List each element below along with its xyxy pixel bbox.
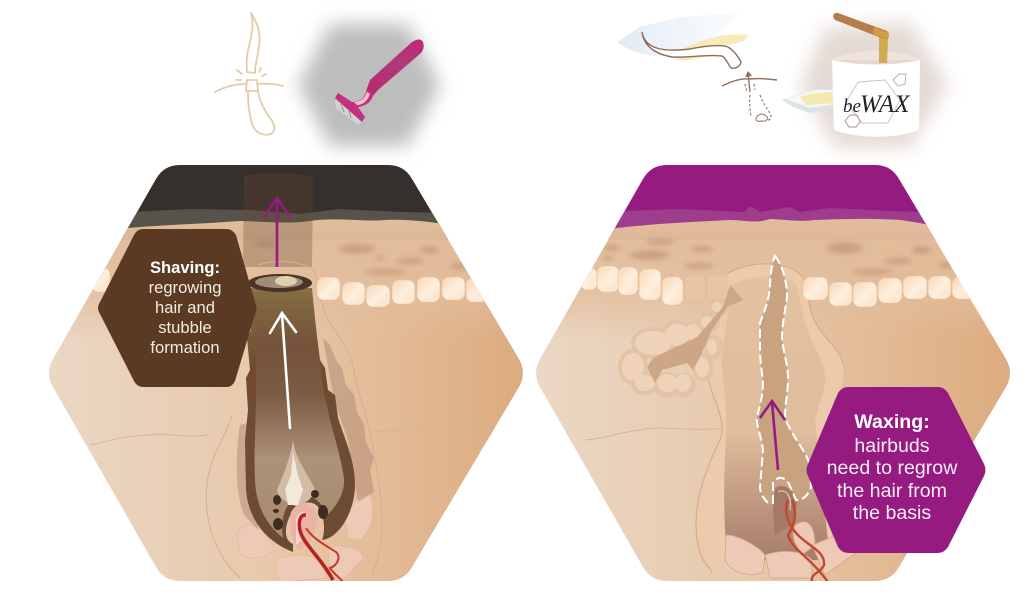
skin layer line [90, 430, 500, 445]
callout: waxing label: Waxing: [854, 411, 930, 433]
melanin spots [273, 490, 328, 530]
pink base cells [725, 522, 860, 578]
hair cut surface [248, 274, 312, 292]
icon: razor on grey hexagon [298, 24, 440, 146]
ghost hair stub [243, 173, 313, 267]
callout: shaving label: regrowing [149, 278, 221, 297]
faded skin cells [685, 280, 728, 300]
panel: shaving hexagon [40, 160, 535, 585]
callout: waxing label [806, 387, 986, 553]
jar: beWAX [843, 91, 911, 118]
jar [832, 13, 920, 137]
callout: shaving label: stubble [158, 318, 212, 337]
purple upper band [608, 165, 936, 240]
removed hair, dashed outline [757, 256, 811, 503]
follicle outline [207, 261, 382, 575]
icon: wax jar with logo [782, 13, 948, 148]
callout: waxing label: need to regrow [827, 457, 958, 479]
icon: hair pulled out with wax strip [617, 13, 777, 121]
blood vessel [786, 500, 830, 585]
follicle channel [722, 264, 844, 538]
hair root core [277, 440, 315, 506]
wax pad [782, 88, 840, 113]
papilla and blood vessel [290, 504, 344, 583]
hair shaft and bulb [245, 288, 355, 552]
dermis smudges [602, 239, 958, 275]
panel: waxing hexagon [525, 160, 1020, 585]
pink base cells [237, 494, 373, 582]
callout: shaving label: Shaving: [150, 258, 220, 277]
outer root sheath [237, 338, 374, 530]
callout: shaving label [98, 229, 256, 387]
callout: shaving label: formation [150, 338, 220, 357]
dark upper band [121, 165, 448, 240]
sebaceous gland [618, 285, 743, 398]
callout: shaving label: hair and [155, 298, 215, 317]
white growth arrow [270, 313, 296, 428]
callout: waxing label: the basis [853, 502, 931, 524]
skin cells row [92, 268, 488, 307]
purple growth arrow [264, 198, 290, 267]
dermis smudges [254, 241, 470, 275]
callout: waxing label: the hair from [837, 480, 947, 502]
icon: cut hair outline [215, 13, 283, 135]
purple growth arrow [760, 401, 785, 470]
callout: waxing label: hairbuds [854, 435, 930, 457]
hair matrix remnant [773, 486, 797, 535]
skin layer line [585, 428, 725, 440]
skin cells row [581, 266, 974, 307]
